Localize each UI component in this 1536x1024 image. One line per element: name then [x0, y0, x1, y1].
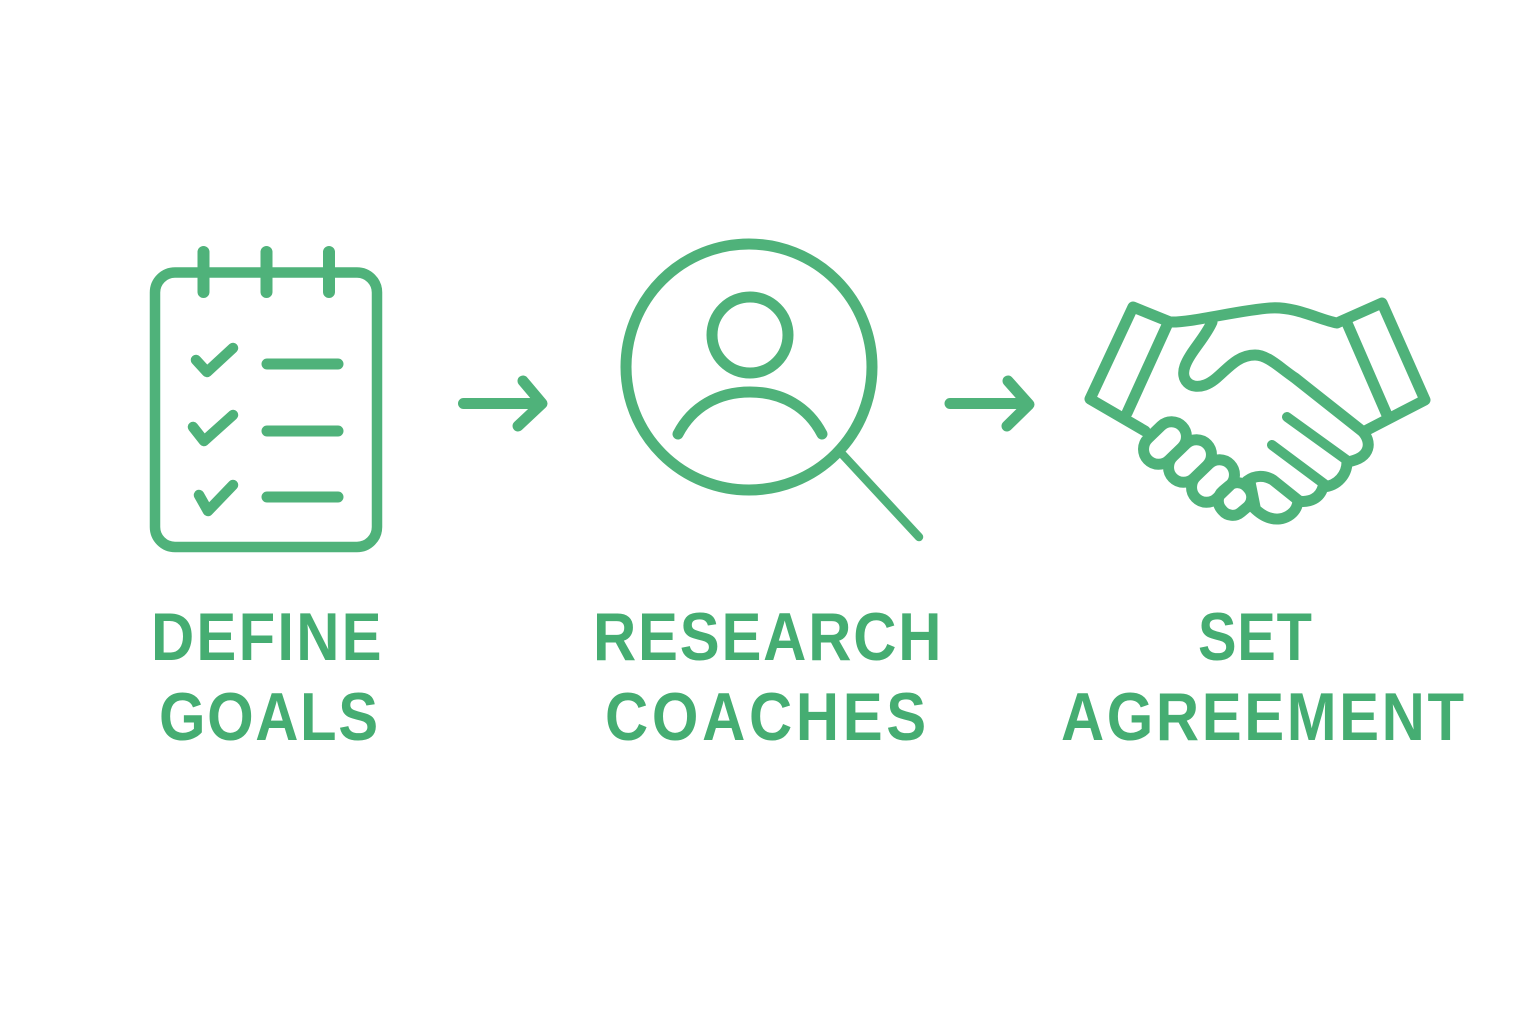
icon: magnifying glass with person — [626, 244, 919, 537]
icon: checklist notepad — [155, 252, 377, 547]
icon: handshake — [1090, 303, 1425, 521]
arrow: define to research — [464, 381, 542, 426]
label: set agreement — [1061, 600, 1464, 755]
label: define goals: DEFINE — [151, 598, 382, 675]
label: research coaches: RESEARCH — [593, 598, 941, 675]
arrow: research to agreement — [950, 381, 1029, 426]
label: research coaches: COACHES — [605, 678, 926, 755]
label: set agreement: AGREEMENT — [1061, 678, 1464, 755]
label: define goals: GOALS — [159, 678, 378, 755]
label: research coaches — [593, 598, 941, 755]
label: set agreement: SET — [1198, 600, 1312, 675]
label: define goals — [151, 598, 382, 755]
